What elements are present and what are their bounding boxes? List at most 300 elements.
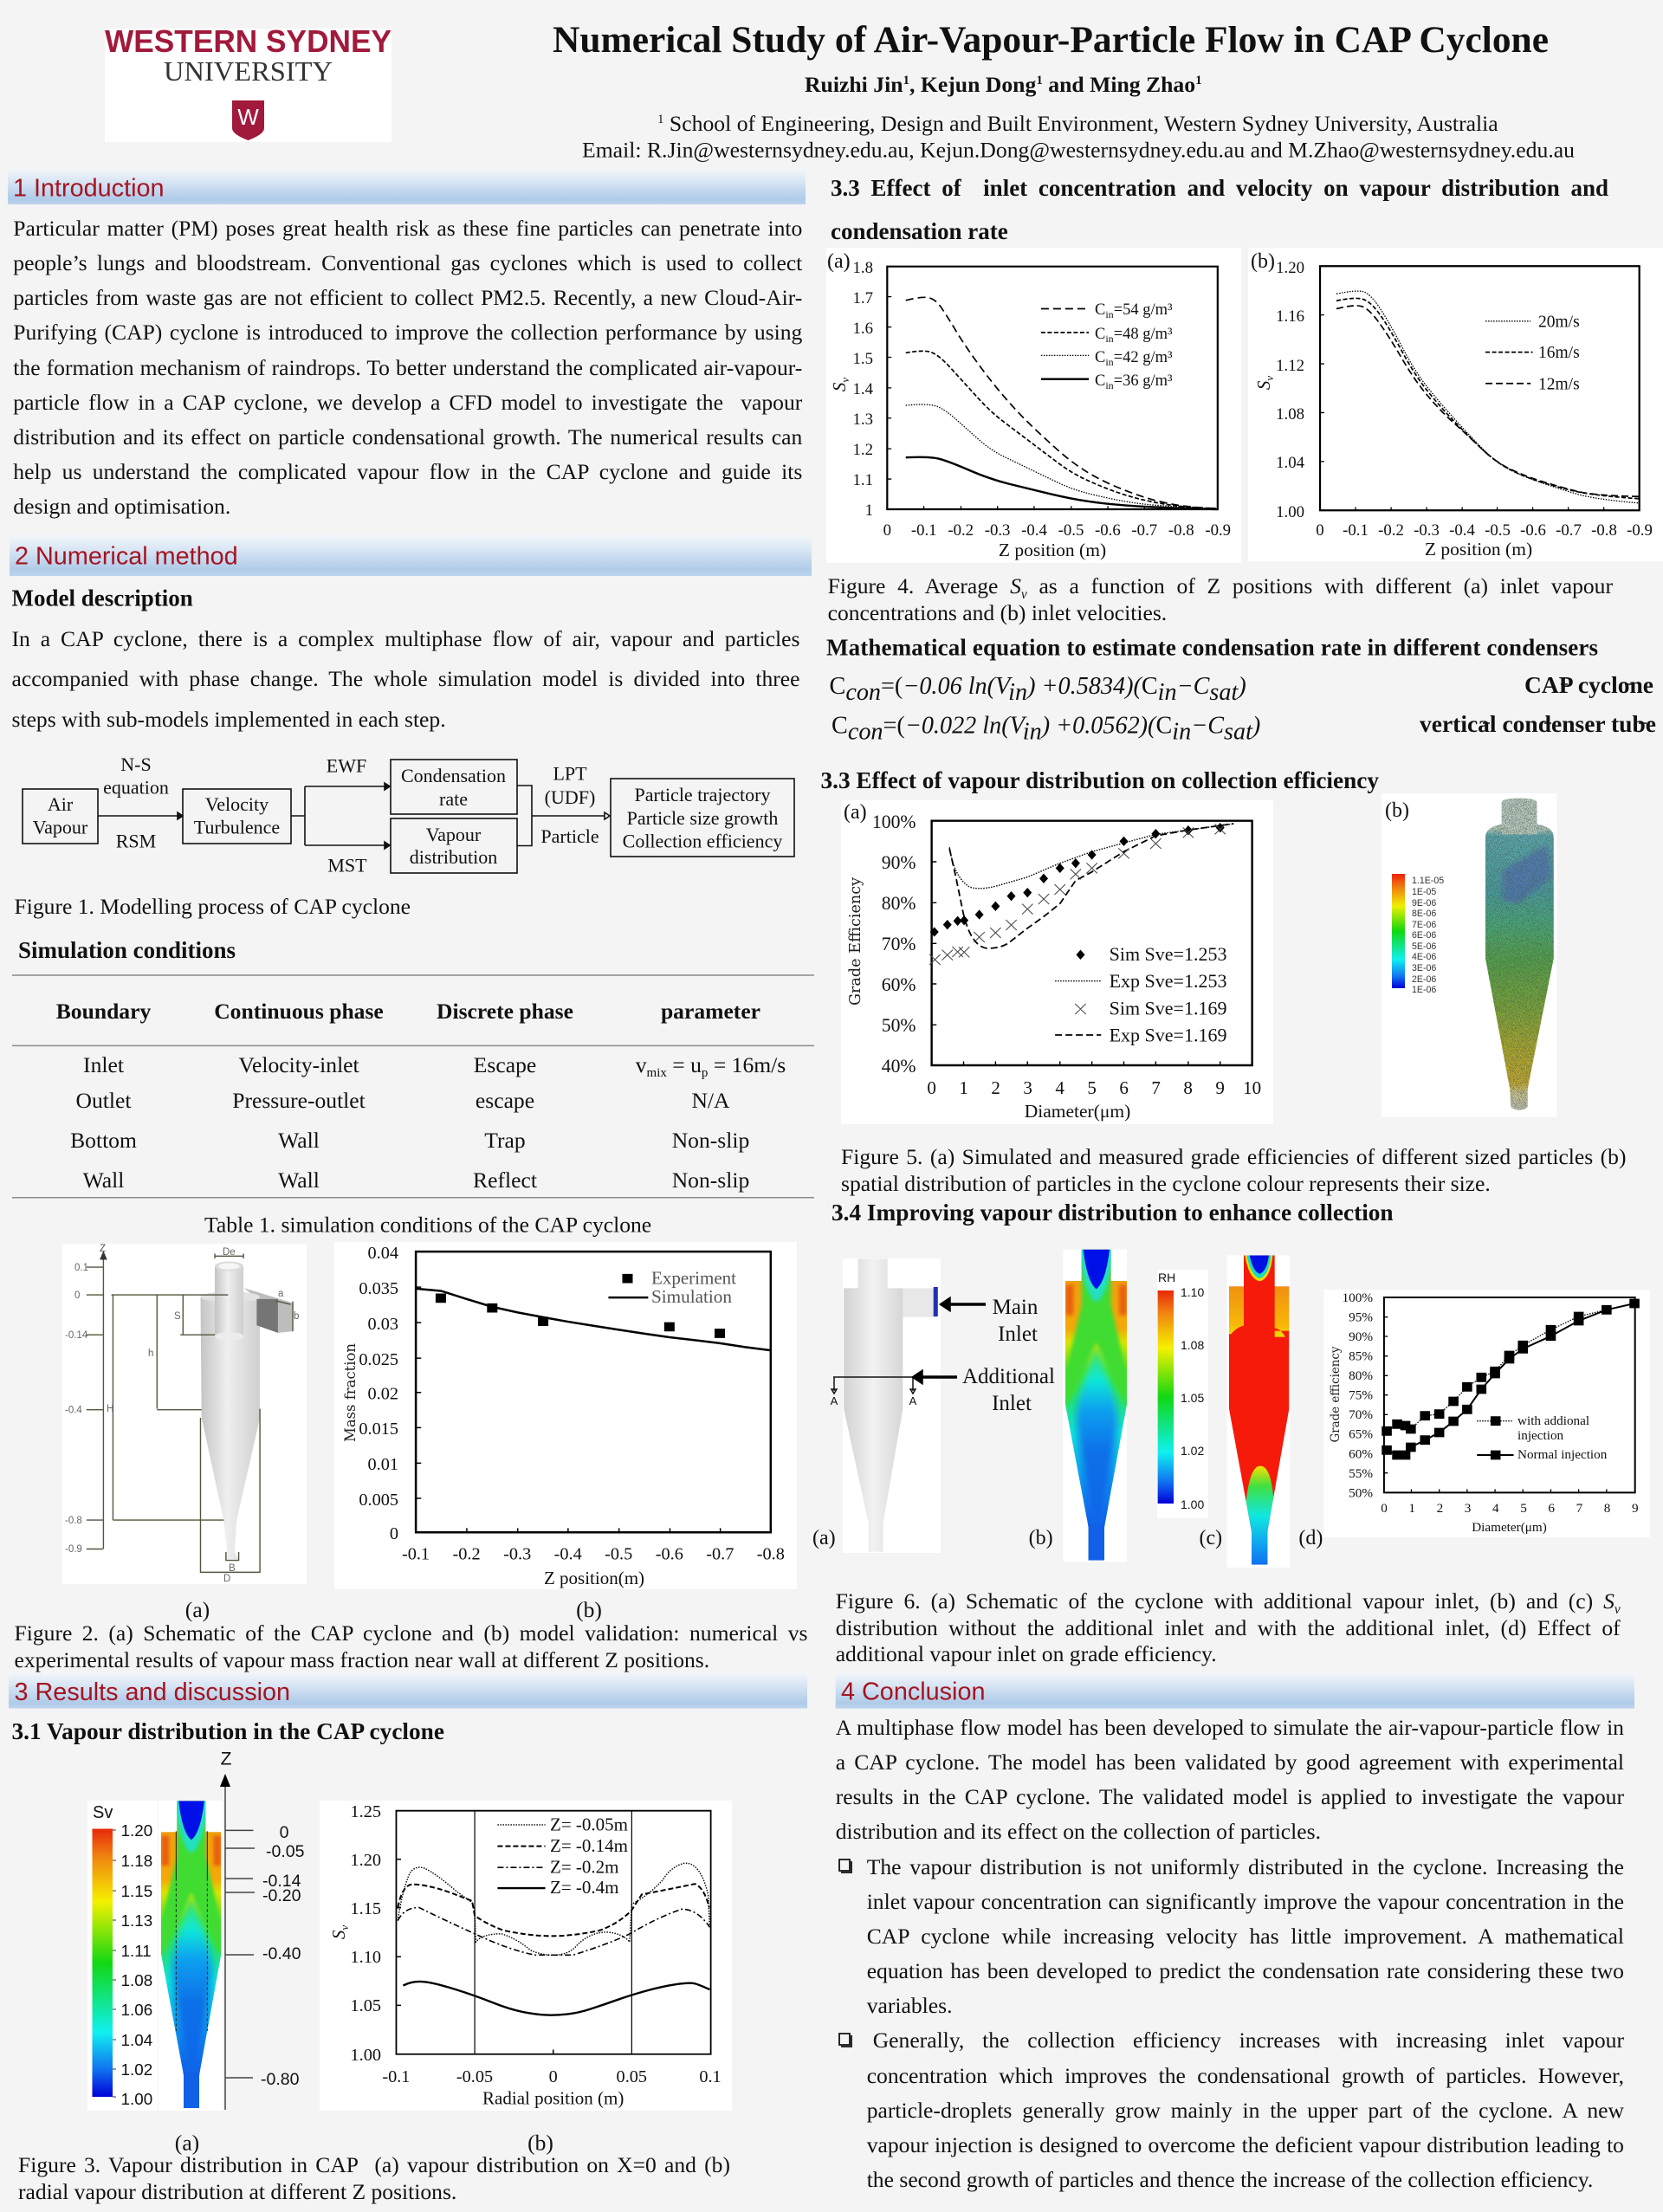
label: N-S equation and RSM: equation (103, 776, 169, 799)
y axis labels: 50% (1349, 1485, 1373, 1500)
row: wall: Wall (278, 1167, 320, 1193)
x axis labels: 0 (1316, 521, 1324, 540)
legend: Sim Sve=1.253 (1110, 943, 1226, 965)
caption: table 1: Table 1. simulation conditions of the CAP cyclone (204, 1213, 651, 1237)
equation: CAP cyclone: in (1158, 679, 1177, 706)
x axis labels: 9 (1215, 1077, 1225, 1098)
schematic dimension labels: -0.14 (65, 1330, 88, 1341)
y axis labels (1276, 259, 1305, 521)
equation: vertical condenser tube: con (848, 719, 883, 745)
emails: Email: R.Jin@westernsydney.edu.au, Kejun.Dong@westernsydney.edu.au and M.Zhao@westernsydney.edu.au (582, 139, 1576, 163)
y axis labels: 1.16 (1276, 307, 1304, 326)
colour bar: 6E-06 (1412, 930, 1436, 941)
colour bar (92, 1803, 152, 2108)
markers: experiment (436, 1274, 725, 1337)
title: Numerical Study of Air-Vapour-Particle Flow in CAP Cyclone (553, 20, 1549, 61)
arrow: split to condensation and vapour (291, 783, 390, 849)
y axis labels: 50% (882, 1015, 916, 1036)
legend: C (1095, 372, 1105, 390)
legend: with addional (1517, 1413, 1589, 1428)
row: bottom: Trap (484, 1128, 526, 1153)
axis title: diameter: Diameter(μm) (1472, 1520, 1547, 1535)
curve: with additional injection (1387, 1303, 1634, 1431)
y axis labels: 80% (1349, 1368, 1373, 1383)
equation: vertical condenser tube: ) +0.0562)( (1040, 712, 1157, 740)
colour bar: 1.08 (121, 1971, 152, 1989)
y axis labels (1343, 1290, 1373, 1500)
icon: university shield (232, 100, 264, 140)
axis title: Sv: S (829, 383, 850, 391)
equation: CAP cyclone: con (845, 679, 881, 706)
box: velocity turbulence (183, 789, 291, 844)
y axis labels: 100% (872, 812, 916, 832)
row: inlet: = 16m/s (708, 1052, 786, 1077)
markers: normal (1382, 1316, 1583, 1459)
figure 4a: Sv vs Z for inlet concentrations (826, 248, 1241, 563)
schematic dimension labels: Z (100, 1244, 106, 1254)
text: model description: steps with sub-models implemented in each step. (12, 707, 446, 732)
x axis labels: -0.5 (1058, 521, 1084, 540)
x axis labels: 6 (1548, 1501, 1555, 1516)
authors: 1 (1195, 74, 1202, 87)
legend: injection (1517, 1428, 1564, 1443)
x axis labels: 0 (927, 1077, 936, 1098)
equation: CAP cyclone: C (1142, 673, 1158, 700)
legend: Z= -0.2m (550, 1857, 618, 1878)
x axis labels: 6 (1119, 1077, 1129, 1098)
figure 2 sub-labels: (b) (576, 1597, 602, 1622)
caption: figure 2: Figure 2. (a) Schematic of the CAP cyclone and (b) model validation: numerical vs (14, 1620, 807, 1646)
icon: checkbox bullet 2 (839, 2034, 851, 2047)
text: conclusion: The vapour distribution is not uniformly distributed in the cyclone. Increasing the (867, 1854, 1624, 1879)
figure 2a: cyclone schematic (62, 1244, 307, 1584)
colour bar: 1.04 (121, 2031, 152, 2049)
curve: Z -0.2 (398, 1907, 709, 1955)
y axis labels: 75% (1349, 1388, 1373, 1403)
box: air vapour: Air (48, 793, 74, 815)
figure 3 sub-labels (175, 2131, 553, 2156)
label: LPT UDF particle: LPT (553, 762, 587, 785)
colour bar: 1.1E-05 (1412, 876, 1444, 886)
y axis labels: 1.08 (1276, 405, 1304, 424)
x axis labels: 7 (1151, 1077, 1161, 1098)
legend: C (1095, 326, 1105, 343)
figure 3a: vapour contour (87, 1750, 305, 2111)
equation: vertical condenser tube: −0.022 ln(V (905, 712, 1027, 740)
x axis labels: 1 (959, 1077, 968, 1098)
caption: figure 5: Figure 5. (a) Simulated and measured grade efficiencies of different sized particles (b) (841, 1144, 1627, 1169)
table header (56, 999, 760, 1024)
y axis labels: 0.01 (367, 1455, 398, 1474)
y axis labels: 1.25 (350, 1802, 381, 1821)
label: additional inlet (962, 1365, 1055, 1415)
legend: in (1105, 379, 1114, 391)
label: additional inlet: Additional (962, 1365, 1055, 1388)
equation: CAP cyclone: CAP cyclone (1524, 672, 1653, 698)
label: LPT UDF particle: Particle (540, 825, 599, 847)
x axis labels (382, 2067, 721, 2086)
icon: checkbox bullet 1 (839, 1860, 851, 1872)
legend: Exp Sve=1.169 (1110, 1025, 1226, 1046)
markers: sim 1.169 (929, 824, 1226, 1014)
schematic dimension labels: -0.8 (65, 1516, 82, 1526)
legend: 16m/s (1538, 344, 1580, 362)
equation: CAP cyclone: −0.06 ln(V (903, 673, 1013, 700)
equation: CAP cyclone: C (830, 673, 845, 700)
legend: Exp Sve=1.253 (1110, 970, 1226, 992)
x axis labels: -0.6 (1095, 521, 1121, 540)
legend: Z= -0.14m (550, 1835, 628, 1856)
box: vapour distribution: Vapour (426, 824, 482, 845)
axis title: grade efficiency: Grade efficiency (1329, 1346, 1343, 1443)
authors: Ruizhi Jin (805, 72, 903, 97)
schematic dimension labels: h (148, 1349, 153, 1359)
x axis labels: 5 (1520, 1501, 1527, 1516)
x axis labels: -0.5 (605, 1545, 632, 1564)
authors: 1 (903, 74, 909, 87)
text: conclusion: results in the CAP cyclone. The validated model is applied to investigate the vapour (836, 1784, 1624, 1809)
caption: figure 6 (836, 1588, 1621, 1666)
heading: effect of vapour distribution on collection efficiency: 3.3 Effect of vapour distribution on collection efficiency (821, 767, 1379, 793)
caption: figure 3: radial vapour distribution at different Z positions. (18, 2179, 456, 2203)
text: model description: accompanied with phase change. The whole simulation model is divided into three (12, 666, 800, 691)
row: outlet: Pressure-outlet (232, 1088, 366, 1113)
row: outlet: N/A (691, 1088, 730, 1113)
affiliation: 1 (657, 113, 663, 126)
x axis labels: -0.1 (402, 1545, 430, 1564)
legend: Normal injection (1517, 1447, 1608, 1462)
axis title: radial position: Radial position (m) (482, 2088, 624, 2109)
y axis labels: 1.00 (350, 2046, 381, 2065)
arrow: additional inlet (914, 1372, 957, 1382)
section bar: 3 Results and discussion: 3 Results and discussion (14, 1678, 290, 1706)
text: conclusion (836, 1715, 1624, 2192)
curve: exp 1.169 (949, 824, 1233, 948)
panel tag (a): (a) (844, 801, 867, 824)
legend: =54 g/m³ (1114, 301, 1173, 319)
text: conclusion: inlet vapour concentration can significantly improve the vapour concentration in the (867, 1889, 1624, 1914)
text: conclusion: Generally, the collection efficiency increases with increasing inlet vapour (873, 2028, 1624, 2053)
markers: additional (1382, 1299, 1639, 1435)
y axis labels: 100% (1343, 1290, 1373, 1305)
section bar: 1 Introduction: 1 Introduction (13, 175, 165, 203)
heading: 3.3 effect of inlet concentration and velocity: condensation rate (831, 218, 1008, 244)
x axis labels: -0.6 (656, 1545, 683, 1564)
tags (a) (b) (c) (d): (a) (812, 1527, 836, 1549)
figure 3b: radial vapour distribution chart (320, 1801, 732, 2111)
label: EWF and MST: EWF (327, 755, 366, 776)
icon: university shield: W (237, 104, 259, 130)
caption: figure 2: experimental results of vapour mass fraction near wall at different Z positions. (14, 1647, 709, 1672)
heading: model description: Model description (12, 585, 193, 611)
panel tag (b): (b) (1251, 250, 1275, 273)
schematic dimension labels: -0.9 (65, 1544, 82, 1555)
legend (1110, 943, 1226, 1046)
figure 6b: contour without additional inlet (1063, 1247, 1132, 1562)
row: bottom: Non-slip (672, 1128, 749, 1153)
x axis labels: -0.8 (1591, 521, 1617, 540)
curve: Z -0.14 (398, 1884, 709, 1936)
caption: figure 6: Figure 6. (a) Schematic of the cyclone with additional vapour inlet, (b) and (c) Sv (836, 1588, 1621, 1617)
tags (a) (b) (c) (d) (812, 1527, 1323, 1549)
equation: CAP cyclone (830, 672, 1653, 706)
row: outlet: Outlet (76, 1088, 131, 1113)
table header: Continuous phase (214, 999, 384, 1024)
curve: 16 m/s (1336, 298, 1640, 499)
axis title: Sv: v (838, 378, 851, 383)
table: simulation conditions (12, 975, 814, 1198)
x axis labels: 2 (991, 1077, 1000, 1098)
figure 2b: model validation chart (334, 1242, 797, 1589)
x axis labels: -0.4 (554, 1545, 582, 1564)
text: conclusion: equation has been developed to predict the condensation rate considering these two (867, 1958, 1624, 1983)
section bar: 1 Introduction (8, 169, 806, 204)
x axis labels: 2 (1437, 1501, 1443, 1516)
legend: =36 g/m³ (1114, 372, 1173, 390)
y axis labels (350, 1802, 381, 2065)
caption: figure 5 (841, 1144, 1627, 1196)
box: air vapour: Vapour (33, 816, 88, 838)
row: bottom: Wall (278, 1128, 320, 1153)
text: introduction: Particular matter (PM) poses great health risk as these fine particles can penetrate into (13, 216, 802, 241)
y axis labels: 0.03 (367, 1315, 398, 1334)
tags (a) (b) (c) (d): (d) (1298, 1527, 1323, 1549)
equation: vertical condenser tube: =( (883, 712, 905, 740)
y axis labels: 60% (1349, 1446, 1373, 1461)
section bar: 4 Conclusion: 4 Conclusion (841, 1678, 985, 1706)
y axis labels: 85% (1349, 1349, 1373, 1364)
legend (550, 1814, 628, 1898)
logo wordmark: WESTERN SYDNEY (105, 23, 391, 59)
x axis labels (1381, 1501, 1639, 1516)
label: main inlet (993, 1296, 1039, 1346)
caption: figure 5: spatial distribution of particles in the cyclone colour represents their size. (841, 1171, 1491, 1196)
y axis labels: 1.8 (853, 259, 873, 277)
row: bottom: Bottom (70, 1128, 137, 1153)
curve: 36 g/m3 (906, 457, 1218, 509)
figure 2 sub-labels (185, 1597, 602, 1622)
y axis labels: 1.20 (1276, 259, 1304, 277)
row: wall: Reflect (473, 1167, 537, 1193)
x axis labels: 4 (1055, 1077, 1064, 1098)
text: introduction: distribution and its effect on particle condensational growth. The numerical results can (13, 424, 802, 450)
contour: cyclone Sv (159, 1799, 226, 2110)
x axis labels: 4 (1492, 1501, 1499, 1516)
text: conclusion: the second growth of particles and thence the increase of the collection efficiency. (867, 2167, 1593, 2192)
y axis labels: 80% (882, 893, 916, 914)
legend: in (1105, 356, 1114, 368)
table header: parameter (661, 999, 760, 1024)
caption: figure 6: distribution without the additional inlet and with the additional inlet, (d) Effect of (836, 1614, 1621, 1640)
y axis labels: 1.12 (1276, 357, 1304, 375)
Z axis with position ticks: -0.14 (262, 1872, 301, 1891)
x axis labels: -0.2 (1378, 521, 1404, 540)
text: introduction: people’s lungs and bloodstream. Conventional gas cyclones which is used to collect (13, 250, 802, 275)
box: particle outputs: Particle size growth (627, 807, 778, 829)
colour bar: 1E-05 (1412, 887, 1436, 897)
Z axis with position ticks: 0 (280, 1823, 289, 1842)
y axis labels: 0.035 (359, 1279, 398, 1298)
caption: figure 3: Figure 3. Vapour distribution in CAP (a) vapour distribution on X=0 and (b) (18, 2152, 730, 2177)
y axis labels: 0.02 (367, 1385, 398, 1404)
x axis labels: 3 (1023, 1077, 1032, 1098)
x axis labels: 8 (1604, 1501, 1611, 1516)
figure 6 colour bar: RH (1157, 1270, 1208, 1518)
axis title: diameter: Diameter(μm) (1025, 1101, 1130, 1122)
colour bar: 1E-06 (1412, 985, 1436, 995)
y axis labels: 70% (882, 934, 916, 954)
x axis labels (1316, 521, 1653, 540)
colour bar: 5E-06 (1412, 941, 1436, 952)
equation: vertical condenser tube: ) (1251, 712, 1260, 740)
y axis labels: 40% (882, 1056, 916, 1077)
heading: mathematical equation: Mathematical equation to estimate condensation rate in different condensers (826, 635, 1598, 661)
authors: 1 (1036, 74, 1043, 87)
y axis labels: 1.05 (350, 1996, 381, 2015)
heading: 3.1: 3.1 Vapour distribution in the CAP cyclone (12, 1718, 444, 1744)
text: conclusion: CAP cyclone while increasing velocity has little improvement. A mathematical (867, 1924, 1624, 1949)
legend: 12m/s (1538, 376, 1580, 393)
x axis labels: 0 (883, 521, 891, 540)
axis title: Sv: S (328, 1931, 349, 1939)
curve: 12 m/s (1336, 306, 1640, 496)
arrow: main inlet (942, 1299, 986, 1310)
legend (1517, 1413, 1608, 1462)
y axis labels: 1 (865, 501, 873, 520)
curve: 42 g/m3 (906, 404, 1218, 509)
x axis labels: -0.6 (1520, 521, 1546, 540)
Z axis with position ticks: -0.40 (262, 1944, 301, 1963)
equation: vertical condenser tube: vertical condenser tube (1420, 711, 1656, 737)
logo subtitle: UNIVERSITY (164, 55, 333, 87)
legend: Z= -0.4m (550, 1877, 618, 1898)
equation: vertical condenser tube (832, 711, 1656, 745)
y axis labels: 1.7 (853, 289, 873, 307)
x axis labels: 10 (1243, 1077, 1261, 1098)
text: conclusion: A multiphase flow model has been developed to simulate the air-vapour-particle flow in (836, 1715, 1624, 1740)
colour bar: 1.06 (121, 2001, 152, 2019)
Z axis with position ticks (220, 1750, 305, 2110)
label: N-S equation and RSM: N-S (120, 754, 152, 775)
figure 6 colour bar: RH: 1.08 (1181, 1338, 1204, 1352)
x axis labels: 7 (1576, 1501, 1583, 1516)
y axis labels: 1.1 (853, 471, 873, 489)
label: LPT UDF particle: (UDF) (545, 786, 595, 808)
Z axis with position ticks: -0.05 (266, 1842, 305, 1861)
label: main inlet: Main (993, 1296, 1039, 1319)
x axis labels: -0.9 (1627, 521, 1653, 540)
text: introduction: help us understand the complicated vapour flow in the CAP cyclone and guide its (13, 459, 802, 484)
curve: Z -0.05 (398, 1863, 709, 1955)
legend (651, 1268, 736, 1307)
text: introduction: particles from waste gas are not efficient to collect PM2.5. Recently, a new Cloud-Air- (13, 285, 802, 310)
x axis labels: -0.7 (1556, 521, 1582, 540)
label: LPT UDF particle (540, 762, 599, 847)
legend: in (1105, 308, 1114, 320)
label: N-S equation and RSM: RSM (116, 830, 156, 852)
row: wall: Non-slip (672, 1167, 749, 1193)
y axis labels: 90% (1349, 1329, 1373, 1344)
x axis labels: -0.05 (456, 2067, 493, 2086)
schematic dimension labels: H (107, 1404, 113, 1414)
row: inlet: v (636, 1052, 647, 1077)
panel: logo (105, 23, 391, 142)
figure 5b: particle size distribution in cyclone (1382, 793, 1557, 1117)
figure 6 colour bar: RH: 1.05 (1181, 1391, 1204, 1405)
y axis labels (853, 259, 874, 520)
x axis labels: 1 (1408, 1501, 1415, 1516)
row: inlet: = u (667, 1052, 702, 1077)
equation: CAP cyclone: −C (1177, 673, 1211, 700)
row: inlet: p (702, 1066, 708, 1080)
equation: vertical condenser tube: in (1023, 719, 1042, 745)
x axis labels: 0.1 (699, 2067, 721, 2086)
legend: C (1095, 301, 1105, 319)
x axis labels: -0.9 (1205, 521, 1231, 540)
y axis labels: 1.10 (350, 1948, 381, 1967)
y axis labels: 1.20 (350, 1851, 381, 1870)
label: EWF and MST: MST (327, 854, 367, 876)
row: wall: Wall (83, 1167, 124, 1193)
schematic dimension labels: 0 (74, 1290, 80, 1301)
legend: 20m/s (1538, 314, 1580, 331)
figure 6 colour bar: RH: 1.00 (1181, 1497, 1204, 1511)
box: condensation rate (391, 760, 517, 814)
caption: figure 4: Figure 4. Average Sv as a function of Z positions with different (a) inlet vapour (828, 573, 1613, 602)
legend: Simulation (651, 1286, 732, 1307)
section bar: 2 Numerical method (10, 535, 812, 576)
schematic dimension labels: D (223, 1574, 230, 1584)
figure 6 colour bar: RH: 1.10 (1181, 1285, 1204, 1299)
authors: and Ming Zhao (1043, 72, 1195, 97)
figure 6d: grade efficiency with injection (1323, 1290, 1650, 1537)
axis title: Z position: Z position (m) (999, 540, 1106, 560)
x axis labels: 0.05 (617, 2067, 647, 2086)
legend (1095, 301, 1173, 391)
colour bar: 1.00 (121, 2090, 152, 2108)
text: model description: In a CAP cyclone, there is a complex multiphase flow of air, vapour and particles (12, 626, 800, 651)
legend: Z= -0.05m (550, 1814, 628, 1834)
colour bar (1392, 874, 1444, 995)
x axis labels: 0 (549, 2067, 558, 2086)
text: introduction: Purifying (CAP) cyclone is introduced to improve the collection performance by using (13, 320, 802, 345)
legend (1538, 314, 1580, 393)
label: N-S equation and RSM (103, 754, 169, 852)
legend: =42 g/m³ (1114, 349, 1173, 366)
authors: , Kejun Dong (909, 72, 1036, 97)
y axis labels: 1.00 (1276, 503, 1304, 521)
x axis labels: -0.1 (1343, 521, 1369, 540)
label: main inlet: Inlet (998, 1323, 1038, 1346)
y axis labels: 1.04 (1276, 454, 1305, 472)
axis title: grade efficiency: Grade Efficiency (846, 876, 864, 1006)
caption: figure 4: concentrations and (b) inlet velocities. (828, 600, 1167, 625)
colour bar: 9E-06 (1412, 898, 1436, 909)
section bar: 3 Results and discussion (9, 1672, 807, 1708)
equation: CAP cyclone: in (1008, 679, 1027, 706)
caption: figure 2 (14, 1620, 807, 1672)
x axis labels: -0.1 (911, 521, 937, 540)
Z axis with position ticks: -0.80 (261, 2070, 300, 2089)
schematic dimension labels: De (223, 1247, 236, 1258)
figure 3 sub-labels: (a) (175, 2131, 199, 2156)
equation: vertical condenser tube: −C (1191, 712, 1225, 740)
schematic dimension labels: -0.4 (65, 1405, 82, 1415)
text: conclusion: vapour injection is designed to overcome the deficient vapour distribution leading to (867, 2132, 1624, 2157)
affiliation: School of Engineering, Design and Built Environment, Western Sydney University, Australia (663, 111, 1498, 136)
Z axis with position ticks: -0.20 (262, 1886, 301, 1905)
colour bar: 2E-06 (1412, 974, 1436, 985)
